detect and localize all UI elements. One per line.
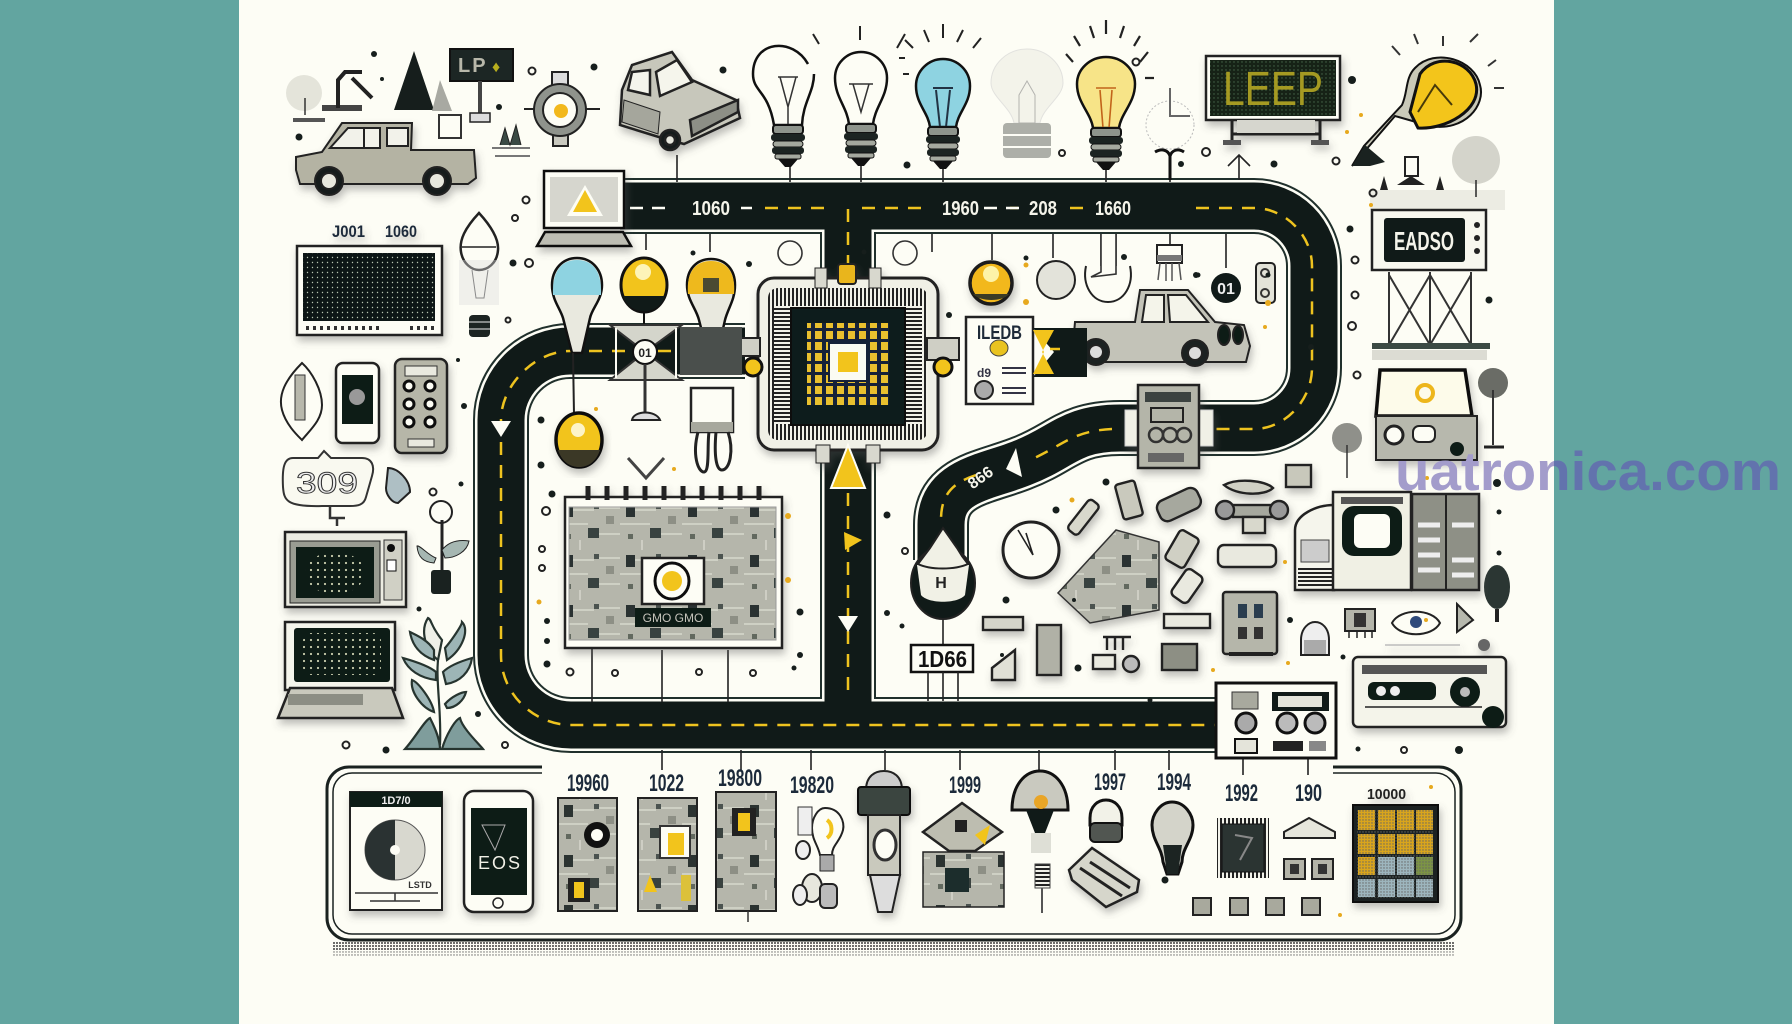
large tilted yellow bulb (1352, 34, 1504, 166)
LED colour grid with label: 10000 (1367, 786, 1406, 803)
leaf capsule icon (281, 363, 322, 440)
cream page panel (239, 0, 1554, 1024)
ghost bulb (991, 49, 1063, 158)
dome capsule (1301, 622, 1329, 655)
capsule with year 1997: 1997 (1094, 769, 1126, 796)
centre road arrow white (838, 616, 858, 632)
faint outline lamp (1146, 88, 1194, 180)
laptop with yellow triangle (537, 171, 631, 246)
small LED sign on post: LP (458, 55, 488, 77)
LED matrix panel with labels: J001 (332, 222, 365, 241)
folded bracket (1069, 848, 1139, 907)
board 3 with year 19800 (716, 765, 776, 922)
road network (501, 206, 1314, 725)
target lamp (524, 72, 600, 146)
yellow and black arrow block (1033, 328, 1087, 377)
leaflet ILEDB: ILEDB (977, 323, 1022, 344)
road end lamp pod: H (935, 575, 947, 592)
two small trees (1332, 368, 1508, 478)
diamond board and board with year 1999 (923, 772, 1004, 907)
connector ticks (592, 155, 1308, 775)
board 1 with year 19960 (558, 770, 617, 911)
small shield (386, 468, 410, 503)
post, trees and ground near billboard (1370, 136, 1505, 210)
scene: sphere, robot arm, tree (286, 51, 452, 120)
chevron (628, 458, 664, 478)
chip with year 1992: 1992 (1225, 780, 1258, 807)
centre road arrow yellow (844, 532, 862, 550)
board 2 with year 1022 (638, 770, 697, 911)
LED colour grid with label (1353, 786, 1438, 902)
monitor card: LSTD (408, 880, 432, 890)
outline bulb B (813, 26, 905, 166)
capsule with year 1997 (1090, 769, 1126, 842)
EADSO billboard with tower (1372, 210, 1490, 360)
play triangle (1457, 604, 1473, 632)
dark numbered dot (1211, 273, 1241, 303)
board 1 with year 19960: 19960 (567, 770, 609, 797)
phone EOS: EOS (478, 853, 520, 873)
small square chip (1345, 609, 1375, 638)
chip: central LED processor (758, 264, 938, 463)
transistor (691, 388, 733, 472)
keypad remote (395, 359, 447, 453)
bulb with year 1994 (1152, 769, 1193, 874)
small bulb and parts with year 19820 (790, 772, 843, 908)
polygon circuit board (1058, 530, 1159, 623)
label house with year 190: 190 (1295, 780, 1322, 807)
yellow triangle marker (831, 445, 865, 488)
small LED sign on post (450, 49, 513, 122)
LED matrix panel with labels (297, 222, 442, 335)
hanging ghost lamp (459, 213, 499, 337)
road year labels (692, 198, 1131, 220)
central LED module (642, 558, 704, 604)
phone EOS (464, 791, 533, 912)
LEEP LED billboard: LEEP (1223, 63, 1323, 116)
LEEP LED billboard (1206, 56, 1340, 145)
road centre dashes (501, 208, 1312, 725)
dark numbered dot: 01 (1217, 281, 1235, 298)
right chip connector (927, 338, 959, 376)
small toggle switch (1256, 263, 1275, 303)
road s-curve label: 866 (965, 464, 997, 493)
outline bulb A (753, 46, 814, 167)
road end lamp pod (911, 528, 975, 645)
road s-curve arrow (1006, 448, 1022, 477)
diamond board and board with year 1999: 1999 (949, 772, 981, 799)
wall clock (1003, 522, 1059, 578)
yellow ball lamp (970, 262, 1012, 304)
connector device on road (1125, 385, 1213, 468)
left road arrow white (491, 421, 511, 437)
yellow pod lamp (556, 413, 602, 467)
small ring markers (342, 58, 1407, 753)
leaflet ILEDB (966, 317, 1033, 404)
phone with speaker screen (336, 363, 379, 443)
small cypress tree (1484, 565, 1510, 622)
brush device (1157, 245, 1182, 281)
module label: GMO GMO (643, 611, 703, 625)
small LED sign on post: ♦ (492, 59, 500, 76)
yellow accent specks (536, 113, 1433, 917)
road year labels: 1960 (942, 198, 979, 220)
chip top LED (815, 264, 881, 288)
board 2 with year 1022: 1022 (649, 770, 684, 797)
scattered dots (296, 51, 1502, 884)
bottom timeline panel (327, 765, 1461, 957)
small bulb and parts with year 19820: 19820 (790, 772, 834, 799)
eye icon (1392, 612, 1440, 634)
speech bubble: 309 (296, 467, 358, 500)
leaflet ILEDB: d9 (977, 366, 991, 380)
chip with year 1992 (1217, 780, 1269, 878)
side-view vintage car (296, 123, 476, 195)
road year labels: 1060 (692, 198, 730, 220)
yellow pin (621, 258, 667, 340)
circuit notepad (565, 486, 782, 648)
watermark uatronica.com: uatronica.com (1395, 440, 1781, 502)
windmill junction: 01 (638, 346, 652, 360)
monitor card (350, 792, 442, 910)
left chip connector (738, 338, 762, 376)
monitor card: 1D7/0 (381, 795, 411, 807)
half-circle lamp (1085, 234, 1131, 302)
halftone disc (1037, 261, 1075, 299)
road year labels: 1660 (1095, 198, 1131, 220)
retro TV (285, 532, 406, 607)
dome lamp and coil (1012, 771, 1068, 913)
road year labels: 208 (1029, 198, 1057, 220)
year label 1D66: 1D66 (918, 646, 967, 672)
chip bottom tabs (816, 445, 880, 463)
blue pin (552, 258, 602, 415)
yellow bulb (1066, 20, 1154, 170)
module label (635, 608, 711, 627)
white road dashes (630, 207, 1024, 209)
year label 1D66 (911, 645, 973, 701)
board 3 with year 19800: 19800 (718, 765, 762, 792)
tall lamp unit (858, 771, 910, 912)
halftone near junction (680, 327, 742, 375)
retro laptop (278, 622, 403, 718)
row of small square parts (1193, 898, 1320, 915)
retro console with yellow ring (1376, 370, 1477, 460)
potted plant (417, 501, 469, 594)
cassette radio (1353, 639, 1506, 728)
vintage computer (1295, 492, 1479, 590)
EADSO billboard with tower: EADSO (1394, 226, 1454, 256)
pickup truck (1073, 290, 1250, 366)
double switch block (1223, 592, 1277, 654)
control panel at road end (1216, 683, 1336, 758)
speech bubble (283, 451, 373, 526)
label house with year 190 (1284, 780, 1335, 879)
blue bulb (899, 24, 981, 169)
small round icons (778, 241, 917, 265)
amber pin (687, 259, 735, 355)
small white frame and grass (439, 115, 530, 156)
windmill junction (610, 325, 682, 420)
big leafy plant (403, 618, 483, 749)
scattered electronic components (983, 465, 1311, 680)
LED matrix panel with labels: 1060 (385, 222, 417, 241)
perspective vintage car (620, 52, 740, 150)
bulb with year 1994: 1994 (1157, 769, 1191, 796)
notepad coil (588, 486, 759, 503)
